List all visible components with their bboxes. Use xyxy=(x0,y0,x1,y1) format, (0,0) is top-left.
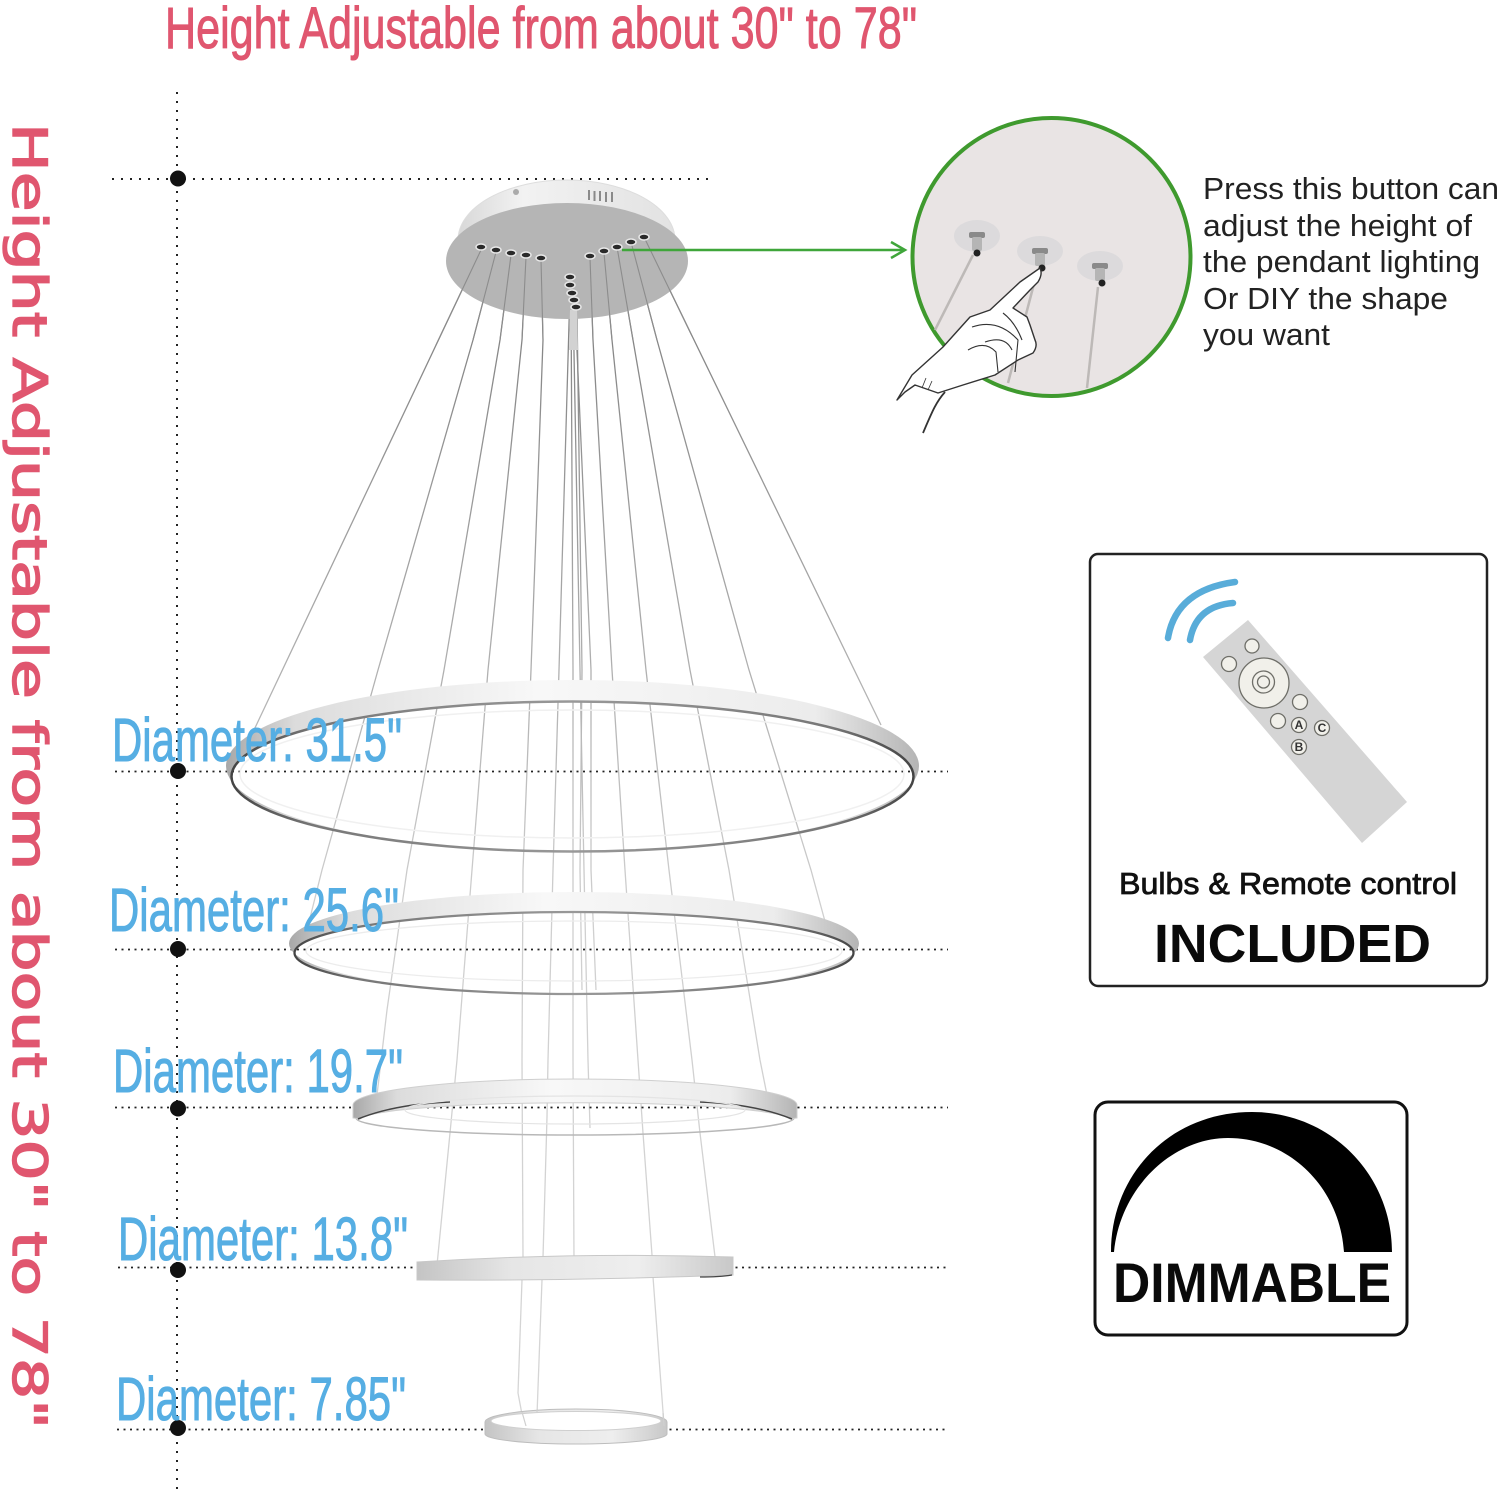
ring 4 band xyxy=(417,1255,733,1280)
arrow to detail xyxy=(622,242,905,258)
icon: dimming arc xyxy=(1111,1112,1392,1252)
line 1: Press this button can xyxy=(1203,172,1499,206)
marker dots xyxy=(170,170,186,1436)
instruction text xyxy=(1203,172,1499,352)
central wire bundle xyxy=(569,310,578,350)
label 19.7: Diameter: 19.7" xyxy=(113,1037,403,1105)
canopy drum xyxy=(458,180,675,300)
button middle xyxy=(1017,236,1063,272)
ring 3 diffuser edge xyxy=(405,1096,745,1124)
remote button letters: C xyxy=(1318,721,1327,735)
ring 5 xyxy=(485,1409,667,1444)
hanging cables xyxy=(935,255,1098,388)
ring 2 band xyxy=(289,892,859,995)
ring 3 bottom edge xyxy=(356,1118,794,1135)
line 5: you want xyxy=(1203,318,1331,352)
button left xyxy=(954,220,1000,256)
line 3: the pendant lighting xyxy=(1203,245,1480,279)
label 7.85: Diameter: 7.85" xyxy=(116,1365,406,1433)
dimension guide lines xyxy=(112,92,948,1489)
canopy screw xyxy=(513,189,519,195)
canopy plate xyxy=(446,203,688,319)
vent slots xyxy=(589,190,612,202)
ring 1 band xyxy=(226,680,919,852)
label 31.5: Diameter: 31.5" xyxy=(112,706,402,774)
line 2: adjust the height of xyxy=(1203,209,1473,243)
button right xyxy=(1077,251,1123,286)
ring 1 xyxy=(226,680,919,852)
vertical title: height adjustable: Height Adjustable from about 30" to 78" xyxy=(1,123,56,1429)
panel border xyxy=(1090,554,1487,986)
ring 3 inner shadow edges xyxy=(358,1102,792,1119)
panel: remote control xyxy=(1090,554,1487,986)
label 13.8: Diameter: 13.8" xyxy=(118,1205,408,1273)
caption included: INCLUDED xyxy=(1154,914,1431,974)
line 4: Or DIY the shape xyxy=(1203,282,1448,316)
ring 5 wire stubs xyxy=(522,1410,664,1426)
diameter labels xyxy=(109,706,408,1433)
remote button letters: A xyxy=(1295,718,1304,732)
ceiling canopy xyxy=(436,180,692,350)
panel: dimmable xyxy=(1095,1102,1407,1335)
caption bulbs and remote: Bulbs & Remote control xyxy=(1119,866,1457,901)
ring 2 diffuser edge xyxy=(306,921,842,981)
remote body xyxy=(1203,620,1407,843)
ring 4 xyxy=(417,1255,733,1280)
caption dimmable: DIMMABLE xyxy=(1113,1251,1391,1314)
icon: pointing hand xyxy=(897,268,1041,433)
ring 5 opening xyxy=(491,1412,661,1430)
ring 3 band xyxy=(353,1079,797,1119)
detail circle: height buttons xyxy=(897,118,1190,433)
wires xyxy=(254,237,881,1425)
wire holes xyxy=(476,234,649,310)
label 25.6: Diameter: 25.6" xyxy=(109,876,399,944)
remote button letters: B xyxy=(1295,740,1304,754)
ring 3 xyxy=(353,1079,797,1135)
remote buttons xyxy=(1222,639,1330,754)
icon: signal waves xyxy=(1168,582,1235,640)
ring 4 shadow xyxy=(700,1275,732,1277)
ring 2 inner shadow edge xyxy=(294,912,854,994)
wires under canopy xyxy=(436,237,692,345)
circle background xyxy=(912,118,1190,396)
ring 1 inner shadow edge xyxy=(232,702,914,852)
ring 1 diffuser edge xyxy=(240,710,904,838)
ring 2 xyxy=(289,892,859,995)
ring 5 band xyxy=(485,1409,667,1444)
remote button letters xyxy=(1295,718,1327,754)
panel border xyxy=(1095,1102,1407,1335)
